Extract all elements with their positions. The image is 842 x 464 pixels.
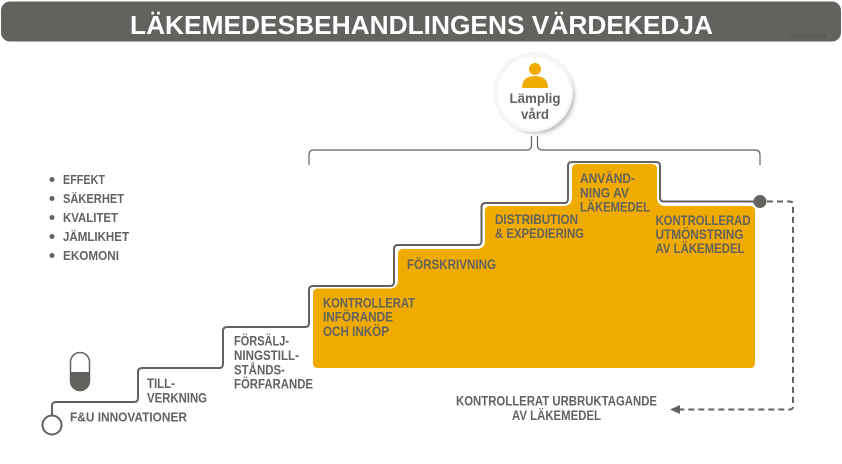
label: kontrollerad utmönstring: UTMÖNSTRING [656,227,744,242]
end dot [754,195,766,208]
label: kontrollerad utmönstring: KONTROLLERAD [656,213,751,228]
badge: lämplig vård [493,52,574,133]
label: förskrivning: FÖRSKRIVNING [407,257,496,272]
quality list: EFFEKT [63,172,105,187]
orange staircase [313,164,755,368]
label: användning: NING AV [580,186,629,200]
label: kontrollerat införande: INFÖRANDE [323,310,393,324]
badge label [510,90,560,122]
icon: person [522,63,548,88]
title: LÄKEMEDESBEHANDLINGENS VÄRDEKEDJA [130,12,713,40]
label: tillverkning [147,376,207,406]
label: försäljningstillståndsförfarande: FÖRFARANDE [234,376,313,392]
stepped value chain line [52,162,760,415]
label: försäljningstillståndsförfarande: FÖRSÄLJ- [234,334,289,348]
label: användning: ANVÄND- [580,171,635,186]
start circle [42,416,62,434]
quality list: KVALITET [63,210,118,225]
document code: SYM 02 / 07 / 2019 [789,34,826,38]
bracket [309,136,760,165]
label: kontrollerat urbruktagande [456,394,657,423]
label: distribution [495,212,584,241]
label: kontrollerat urbruktagande: KONTROLLERAT URBRUKTAGANDE [456,394,657,408]
label: kontrollerad utmönstring [656,213,751,256]
label: kontrollerat införande: OCH INKÖP [323,324,389,339]
label: försäljningstillståndsförfarande [234,334,313,392]
label: försäljningstillståndsförfarande: NINGSTILL- [234,348,299,363]
label: användning: LÄKEMEDEL [580,200,650,214]
label: distribution: DISTRIBUTION [495,212,578,227]
icon: capsule [70,352,90,390]
label: försäljningstillståndsförfarande: STÅNDS- [234,362,285,378]
label: tillverkning: TILL- [147,376,175,391]
label: kontrollerat införande: KONTROLLERAT [323,296,416,310]
label: tillverkning: VERKNING [147,390,207,406]
badge label: vård [521,106,549,122]
quality list: SÄKERHET [63,191,124,206]
quality list: JÄMLIKHET [63,229,129,244]
quality list: EKOMONI [63,248,119,263]
label: F&U innovationer: F&U INNOVATIONER [70,410,188,424]
quality list [50,172,129,263]
dashed return arrow [670,202,793,414]
title bar [1,2,841,42]
badge label: Lämplig [510,90,560,106]
label: kontrollerat urbruktagande: AV LÄKEMEDEL [512,408,601,423]
label: distribution: & EXPEDIERING [495,226,584,241]
label: kontrollerat införande [323,296,416,339]
label: användning [580,171,650,214]
label: kontrollerad utmönstring: AV LÄKEMEDEL [656,241,744,256]
